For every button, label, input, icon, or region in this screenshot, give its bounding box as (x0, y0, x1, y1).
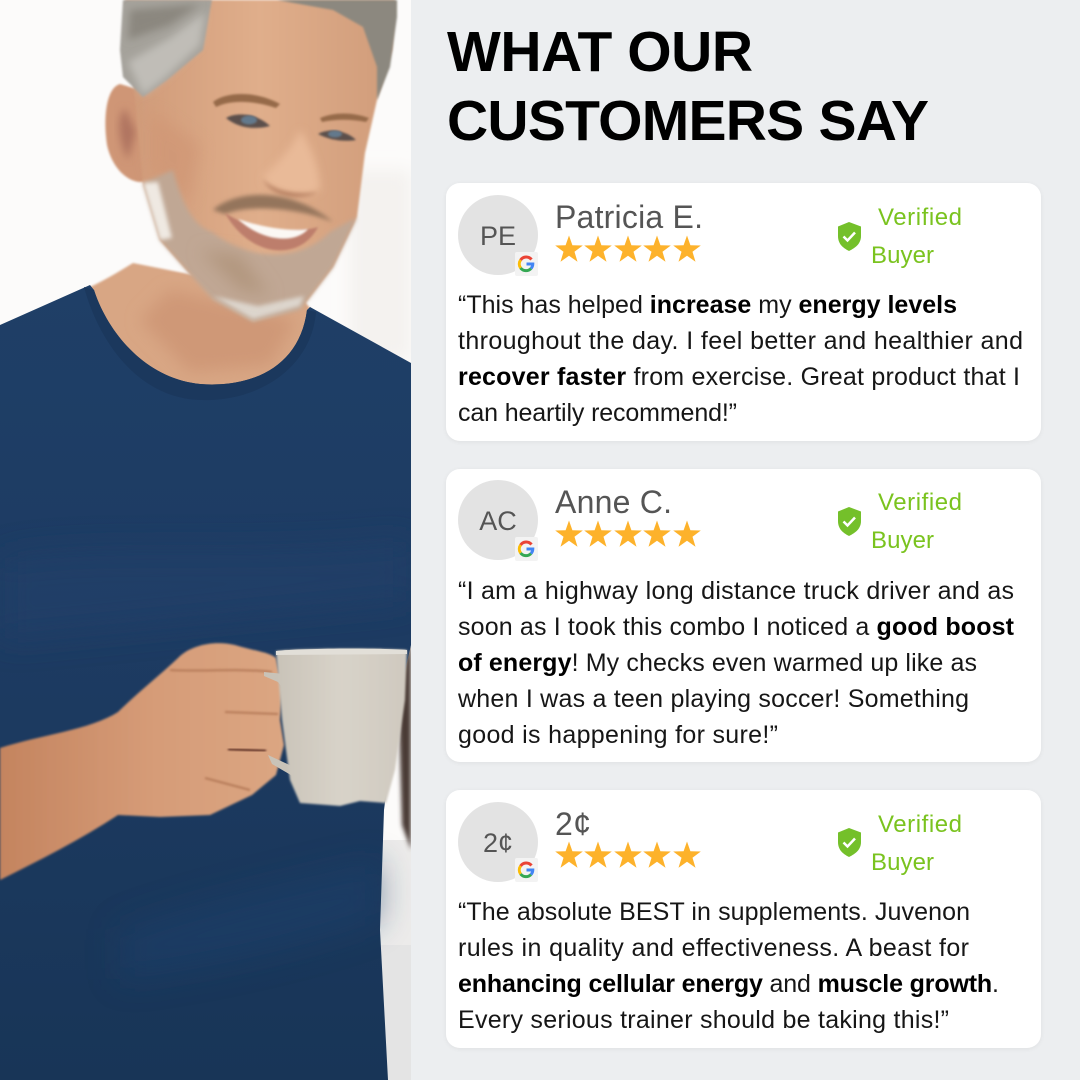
reviewer name: 2¢ (555, 806, 591, 842)
review text (458, 291, 1023, 427)
five star rating (555, 842, 701, 868)
review text: throughout the day. I feel better and healthier and (458, 327, 1023, 355)
panel: review card Patricia E. (446, 183, 1041, 441)
face (125, 0, 395, 322)
neck (90, 262, 311, 384)
verified buyer badge: Buyer (871, 527, 934, 554)
forearm and hand (0, 643, 284, 880)
verified buyer badge: Verified (878, 204, 962, 231)
avatar PE (458, 195, 538, 276)
reviewer name: Patricia E. (555, 199, 703, 235)
verified buyer badge: Verified (878, 489, 962, 516)
review text: “I am a highway long distance truck driver and as (458, 577, 1014, 605)
avatar PE: PE (480, 221, 516, 251)
cheek lines (169, 140, 192, 182)
review text: rules in quality and effectiveness. A beast for (458, 934, 969, 962)
review text: of energy! My checks even warmed up like as (458, 649, 977, 677)
reviewer name: Anne C. (555, 484, 672, 520)
eyebrows (213, 94, 280, 108)
eyes (226, 114, 270, 128)
verified buyer badge (838, 204, 962, 269)
verified buyer badge (838, 811, 962, 876)
review text: “This has helped increase my energy levels (458, 291, 957, 319)
title: CUSTOMERS SAY (447, 89, 929, 153)
five star rating (555, 520, 701, 547)
review text (458, 898, 999, 1034)
verified buyer badge: Verified (878, 811, 962, 838)
avatar 2¢: 2¢ (483, 828, 513, 858)
avatar 2¢ (458, 802, 538, 882)
moustache (213, 195, 333, 222)
avatar AC (458, 480, 538, 561)
panel: review card Anne C. (446, 469, 1041, 762)
review text: soon as I took this combo I noticed a good boost (458, 613, 1015, 641)
teeth (238, 219, 308, 239)
hair left (120, 0, 212, 97)
verified buyer badge (838, 489, 962, 554)
review text: “The absolute BEST in supplements. Juvenon (458, 898, 970, 926)
review text: Every serious trainer should be taking this!” (458, 1006, 949, 1034)
title: WHAT OUR (447, 20, 753, 84)
verified buyer badge: Buyer (871, 242, 934, 269)
review text: can heartily recommend!” (458, 399, 737, 427)
ear (104, 82, 144, 184)
nose (266, 135, 320, 193)
review text: enhancing cellular energy and muscle growth. (458, 970, 999, 998)
mug (264, 672, 291, 775)
review text: when I was a teen playing soccer! Something (457, 685, 969, 713)
lips (225, 213, 318, 250)
t-shirt (0, 285, 411, 1080)
title (447, 20, 929, 153)
panel: review card 2¢ (446, 790, 1041, 1048)
five star rating (555, 236, 701, 262)
review text: recover faster from exercise. Great product that I (458, 363, 1020, 391)
review text: good is happening for sure!” (458, 721, 778, 749)
verified buyer badge: Buyer (871, 849, 934, 876)
avatar AC: AC (479, 506, 517, 536)
photo: smiling man holding a mug (0, 0, 411, 1080)
review text (457, 577, 1015, 749)
beard (143, 170, 357, 322)
hair right (277, 0, 397, 100)
